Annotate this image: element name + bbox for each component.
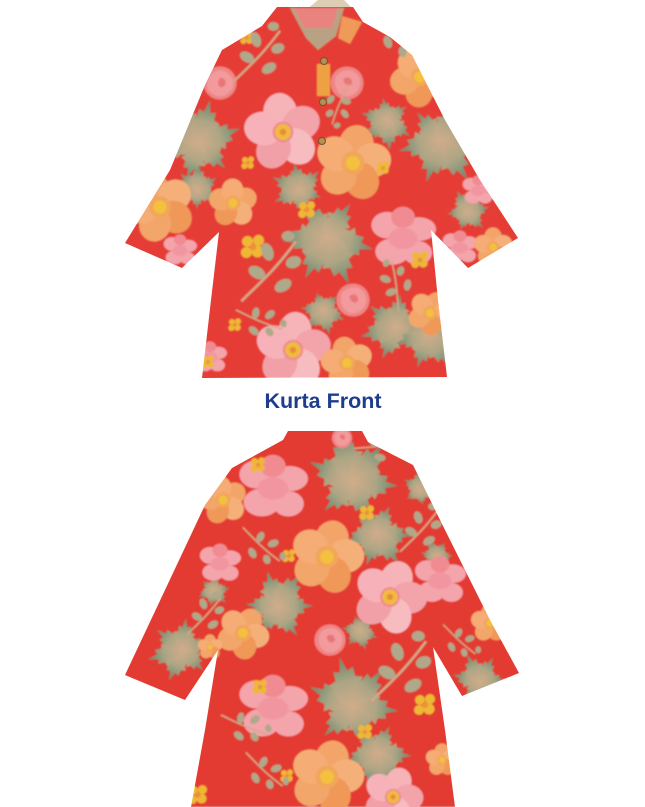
buttons	[318, 58, 328, 144]
hanger	[306, 0, 358, 16]
collar band right print	[338, 16, 362, 44]
caption: Kurta Front: Kurta Front	[264, 389, 382, 413]
back kurta garment	[110, 415, 530, 807]
placket print	[317, 64, 330, 96]
infographic canvas	[125, 0, 519, 807]
front kurta garment	[125, 0, 518, 378]
inner collar and neck	[290, 8, 344, 50]
